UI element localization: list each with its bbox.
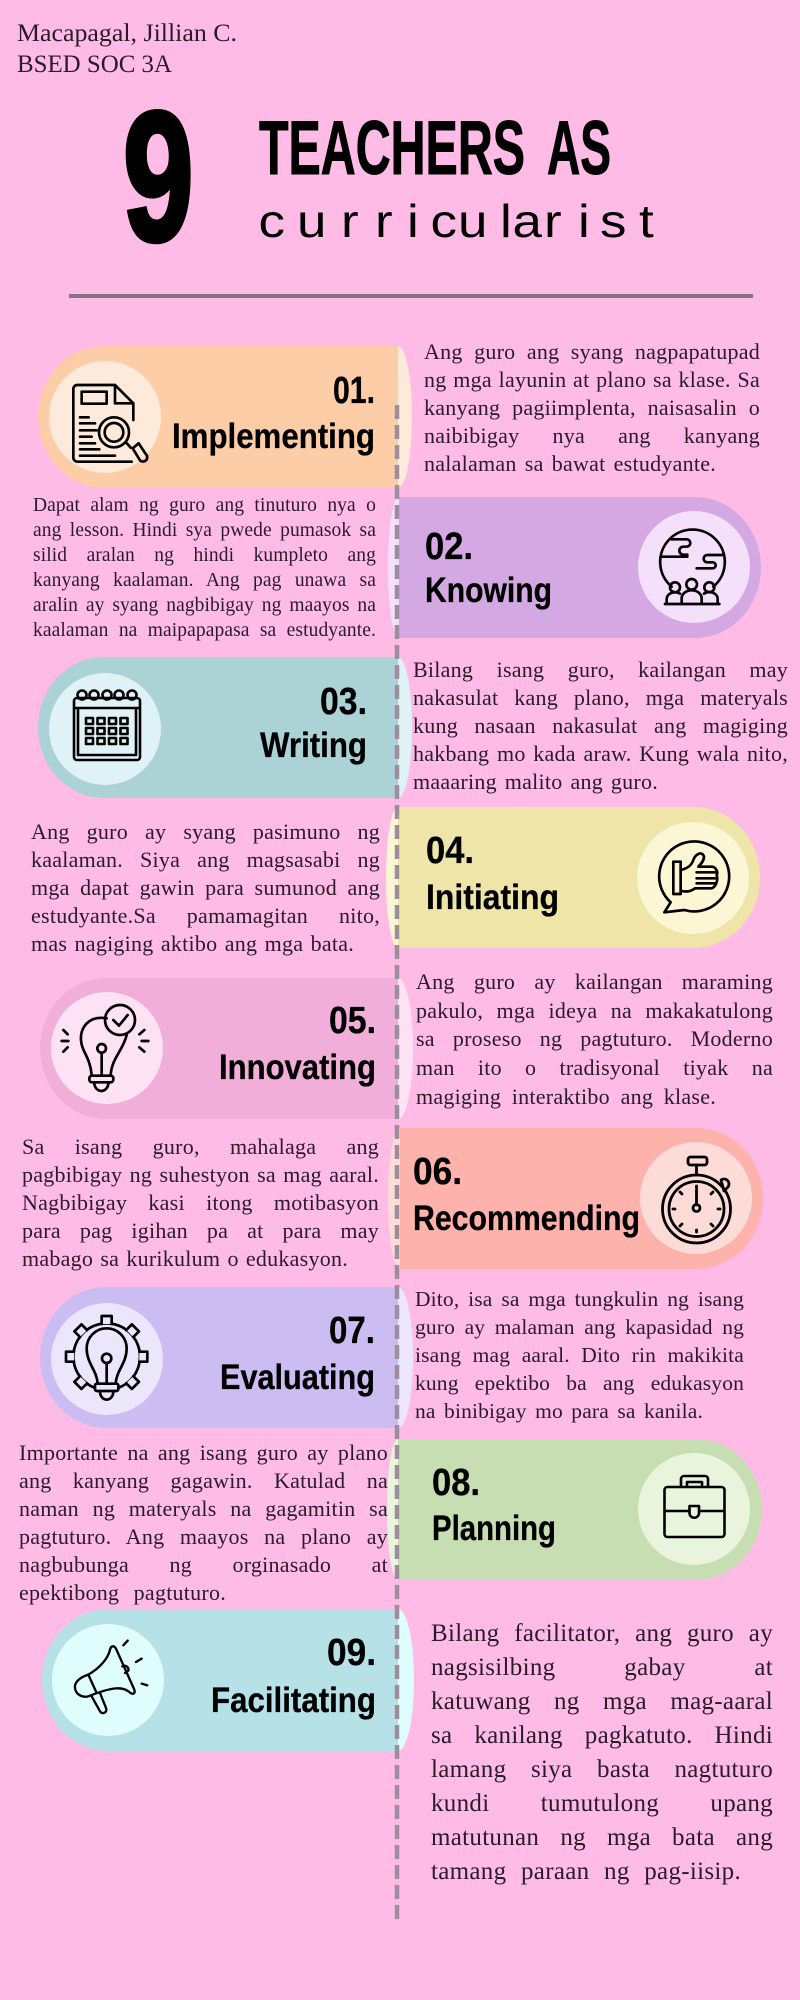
text block: writing: Bilang isang guro, kailangan may	[413, 657, 788, 682]
text block: evaluating: Dito, isa sa mga tungkulin ng isang	[415, 1287, 744, 1311]
icon: stopwatch	[662, 1157, 730, 1243]
text block: facilitating: matutunan ng mga bata ang	[431, 1824, 773, 1851]
text block: writing	[413, 657, 788, 794]
text block: implementing: Ang guro ang syang nagpapatupad	[424, 339, 760, 364]
text block: initiating: estudyante.Sa pamamagitan nito,	[31, 903, 380, 928]
step number 03: 03.	[320, 681, 367, 723]
text block: writing: maaaring malito ang guro.	[413, 769, 658, 794]
step name: Recommending	[413, 1199, 640, 1238]
text block: facilitating: kundi tumutulong upang	[431, 1790, 773, 1817]
icon: megaphone	[75, 1641, 147, 1713]
panel: 06 Recommending	[388, 1128, 763, 1269]
text block: planning	[19, 1440, 388, 1605]
dashed center timeline	[395, 405, 399, 1920]
icon: light bulb with check	[62, 1005, 148, 1091]
panel: 01 Implementing	[38, 346, 412, 488]
text block: evaluating: kung epektibo ba ang edukasyon	[415, 1371, 744, 1395]
text block: implementing: naibibigay nya ang kanyang	[424, 423, 760, 448]
icon: briefcase	[664, 1476, 724, 1537]
text block: innovating: sa proseso ng pagtuturo. Moderno	[416, 1026, 773, 1051]
text block: innovating: Ang guro ay kailangan maraming	[416, 969, 773, 994]
icon: globe with people	[660, 530, 725, 604]
text block: facilitating	[431, 1620, 773, 1885]
text block: innovating	[416, 969, 773, 1109]
icon: gear with light bulb	[66, 1316, 147, 1400]
text block: initiating	[31, 819, 380, 956]
text block: writing: kung nasaan nakasulat ang magiging	[413, 713, 788, 738]
step name: Innovating	[219, 1048, 376, 1087]
panel: 09 Facilitating	[42, 1609, 414, 1751]
text block: evaluating: na binibigay mo para sa kanila.	[415, 1399, 703, 1423]
icon: thumbs up speech bubble	[659, 841, 729, 912]
text block: writing: nakasulat kang plano, mga materyals	[413, 685, 788, 710]
text block: knowing: kanyang kaalaman. Ang pag unawa sa	[33, 570, 376, 591]
text block: planning: epektibong pagtuturo.	[19, 1580, 226, 1605]
big number 9: 9	[123, 75, 194, 280]
icon: document with magnifier	[73, 385, 147, 462]
step number 06: 06.	[413, 1151, 462, 1193]
text block: planning: pagtuturo. Ang maayos na plano ay	[19, 1524, 388, 1549]
text block: recommending: pagbibigay ng suhestyon sa mag aaral.	[22, 1162, 379, 1187]
text block: implementing	[424, 339, 760, 476]
text block: innovating: pakulo, mga ideya na makakatulong	[416, 998, 773, 1023]
text block: recommending: mabago sa kurikulum o edukasyon.	[22, 1246, 348, 1271]
step number 07: 07.	[329, 1310, 375, 1352]
header divider	[69, 294, 753, 298]
text block: initiating: mas nagiging aktibo ang mga bata.	[31, 931, 354, 956]
step name: Implementing	[172, 417, 375, 456]
text block: evaluating: guro ay malaman ang kapasidad ng	[415, 1315, 744, 1339]
text block: knowing	[33, 495, 376, 641]
text block: planning: Importante na ang isang guro ay plano	[19, 1440, 388, 1465]
author name and section: BSED SOC 3A	[17, 51, 172, 78]
text block: implementing: nalalaman sa bawat estudyante.	[424, 451, 716, 476]
text block: implementing: kanyang pagiimplenta, naisasalin o	[424, 395, 760, 420]
step number 09: 09.	[327, 1632, 376, 1674]
text block: recommending: Sa isang guro, mahalaga ang	[22, 1134, 379, 1159]
title: teachers as: TEACHERS	[259, 106, 525, 191]
text block: writing: hakbang mo kada araw. Kung wala nito,	[413, 741, 788, 766]
step name: Writing	[260, 726, 367, 765]
text block: initiating: kaalaman. Siya ang magsasabi ng	[31, 847, 380, 872]
author name and section: Macapagal, Jillian C.	[17, 20, 237, 47]
step number 02: 02.	[425, 526, 473, 568]
text block: facilitating: sa kanilang pagkatuto. Hindi	[431, 1722, 773, 1749]
text block: innovating: man ito o tradisyonal tiyak na	[416, 1055, 773, 1080]
text block: planning: ang kanyang gagawin. Katulad na	[19, 1468, 388, 1493]
panel: 02 Knowing	[388, 497, 761, 638]
text block: facilitating: nagsisilbing gabay at	[431, 1654, 773, 1681]
text block: facilitating: tamang paraan ng pag-iisip.	[431, 1858, 741, 1885]
text block: implementing: ng mga layunin at plano sa klase. Sa	[424, 367, 760, 392]
step number 08: 08.	[432, 1462, 480, 1504]
text block: initiating: Ang guro ay syang pasimuno ng	[31, 819, 380, 844]
text block: innovating: magiging interaktibo ang klase.	[416, 1084, 716, 1109]
text block: knowing: silid aralan ng hindi kumpleto ang	[33, 545, 376, 566]
text block: recommending	[22, 1134, 379, 1271]
text block: evaluating	[415, 1287, 744, 1423]
step number 05: 05.	[329, 1000, 376, 1042]
panel: 07 Evaluating	[40, 1287, 413, 1428]
text block: facilitating: katuwang ng mga mag-aaral	[431, 1688, 773, 1715]
text block: knowing: Dapat alam ng guro ang tinuturo nya o	[33, 495, 376, 516]
text block: facilitating: Bilang facilitator, ang guro ay	[431, 1620, 773, 1647]
title: teachers as: AS	[547, 106, 611, 191]
icon: calendar	[74, 690, 140, 760]
step name: Initiating	[426, 878, 559, 917]
text block: recommending: Nagbibigay kasi itong motibasyon	[22, 1190, 379, 1215]
step name: Evaluating	[220, 1358, 375, 1397]
panel: 08 Planning	[387, 1439, 762, 1580]
text block: evaluating: isang mag aaral. Dito rin makikita	[415, 1343, 744, 1367]
text block: knowing: aralin ay syang nagbibigay ng maayos na	[33, 595, 376, 616]
text block: initiating: mga dapat gawin para sumunod ang	[31, 875, 380, 900]
step number 04: 04.	[426, 830, 474, 872]
text block: planning: naman ng materyals na gagamitin sa	[19, 1496, 388, 1521]
text block: knowing: ang lesson. Hindi sya pwede pumasok sa	[33, 520, 376, 541]
step number 01: 01.	[333, 370, 375, 412]
text block: recommending: para pag igihan pa at para may	[22, 1218, 379, 1243]
step name: Knowing	[425, 571, 552, 610]
panel: 04 Initiating	[386, 807, 760, 948]
author name and section	[17, 20, 237, 78]
panel: 05 Innovating	[40, 978, 413, 1119]
title: curricularist: curricularist	[259, 195, 654, 247]
panel: 03 Writing	[38, 657, 412, 798]
text block: planning: nagbubunga ng orginasado at	[19, 1552, 388, 1577]
text block: facilitating: lamang siya basta nagtuturo	[431, 1756, 773, 1783]
step name: Facilitating	[211, 1681, 376, 1720]
text block: knowing: kaalaman na maipapapasa sa estudyante.	[33, 620, 376, 641]
step name: Planning	[432, 1509, 556, 1548]
